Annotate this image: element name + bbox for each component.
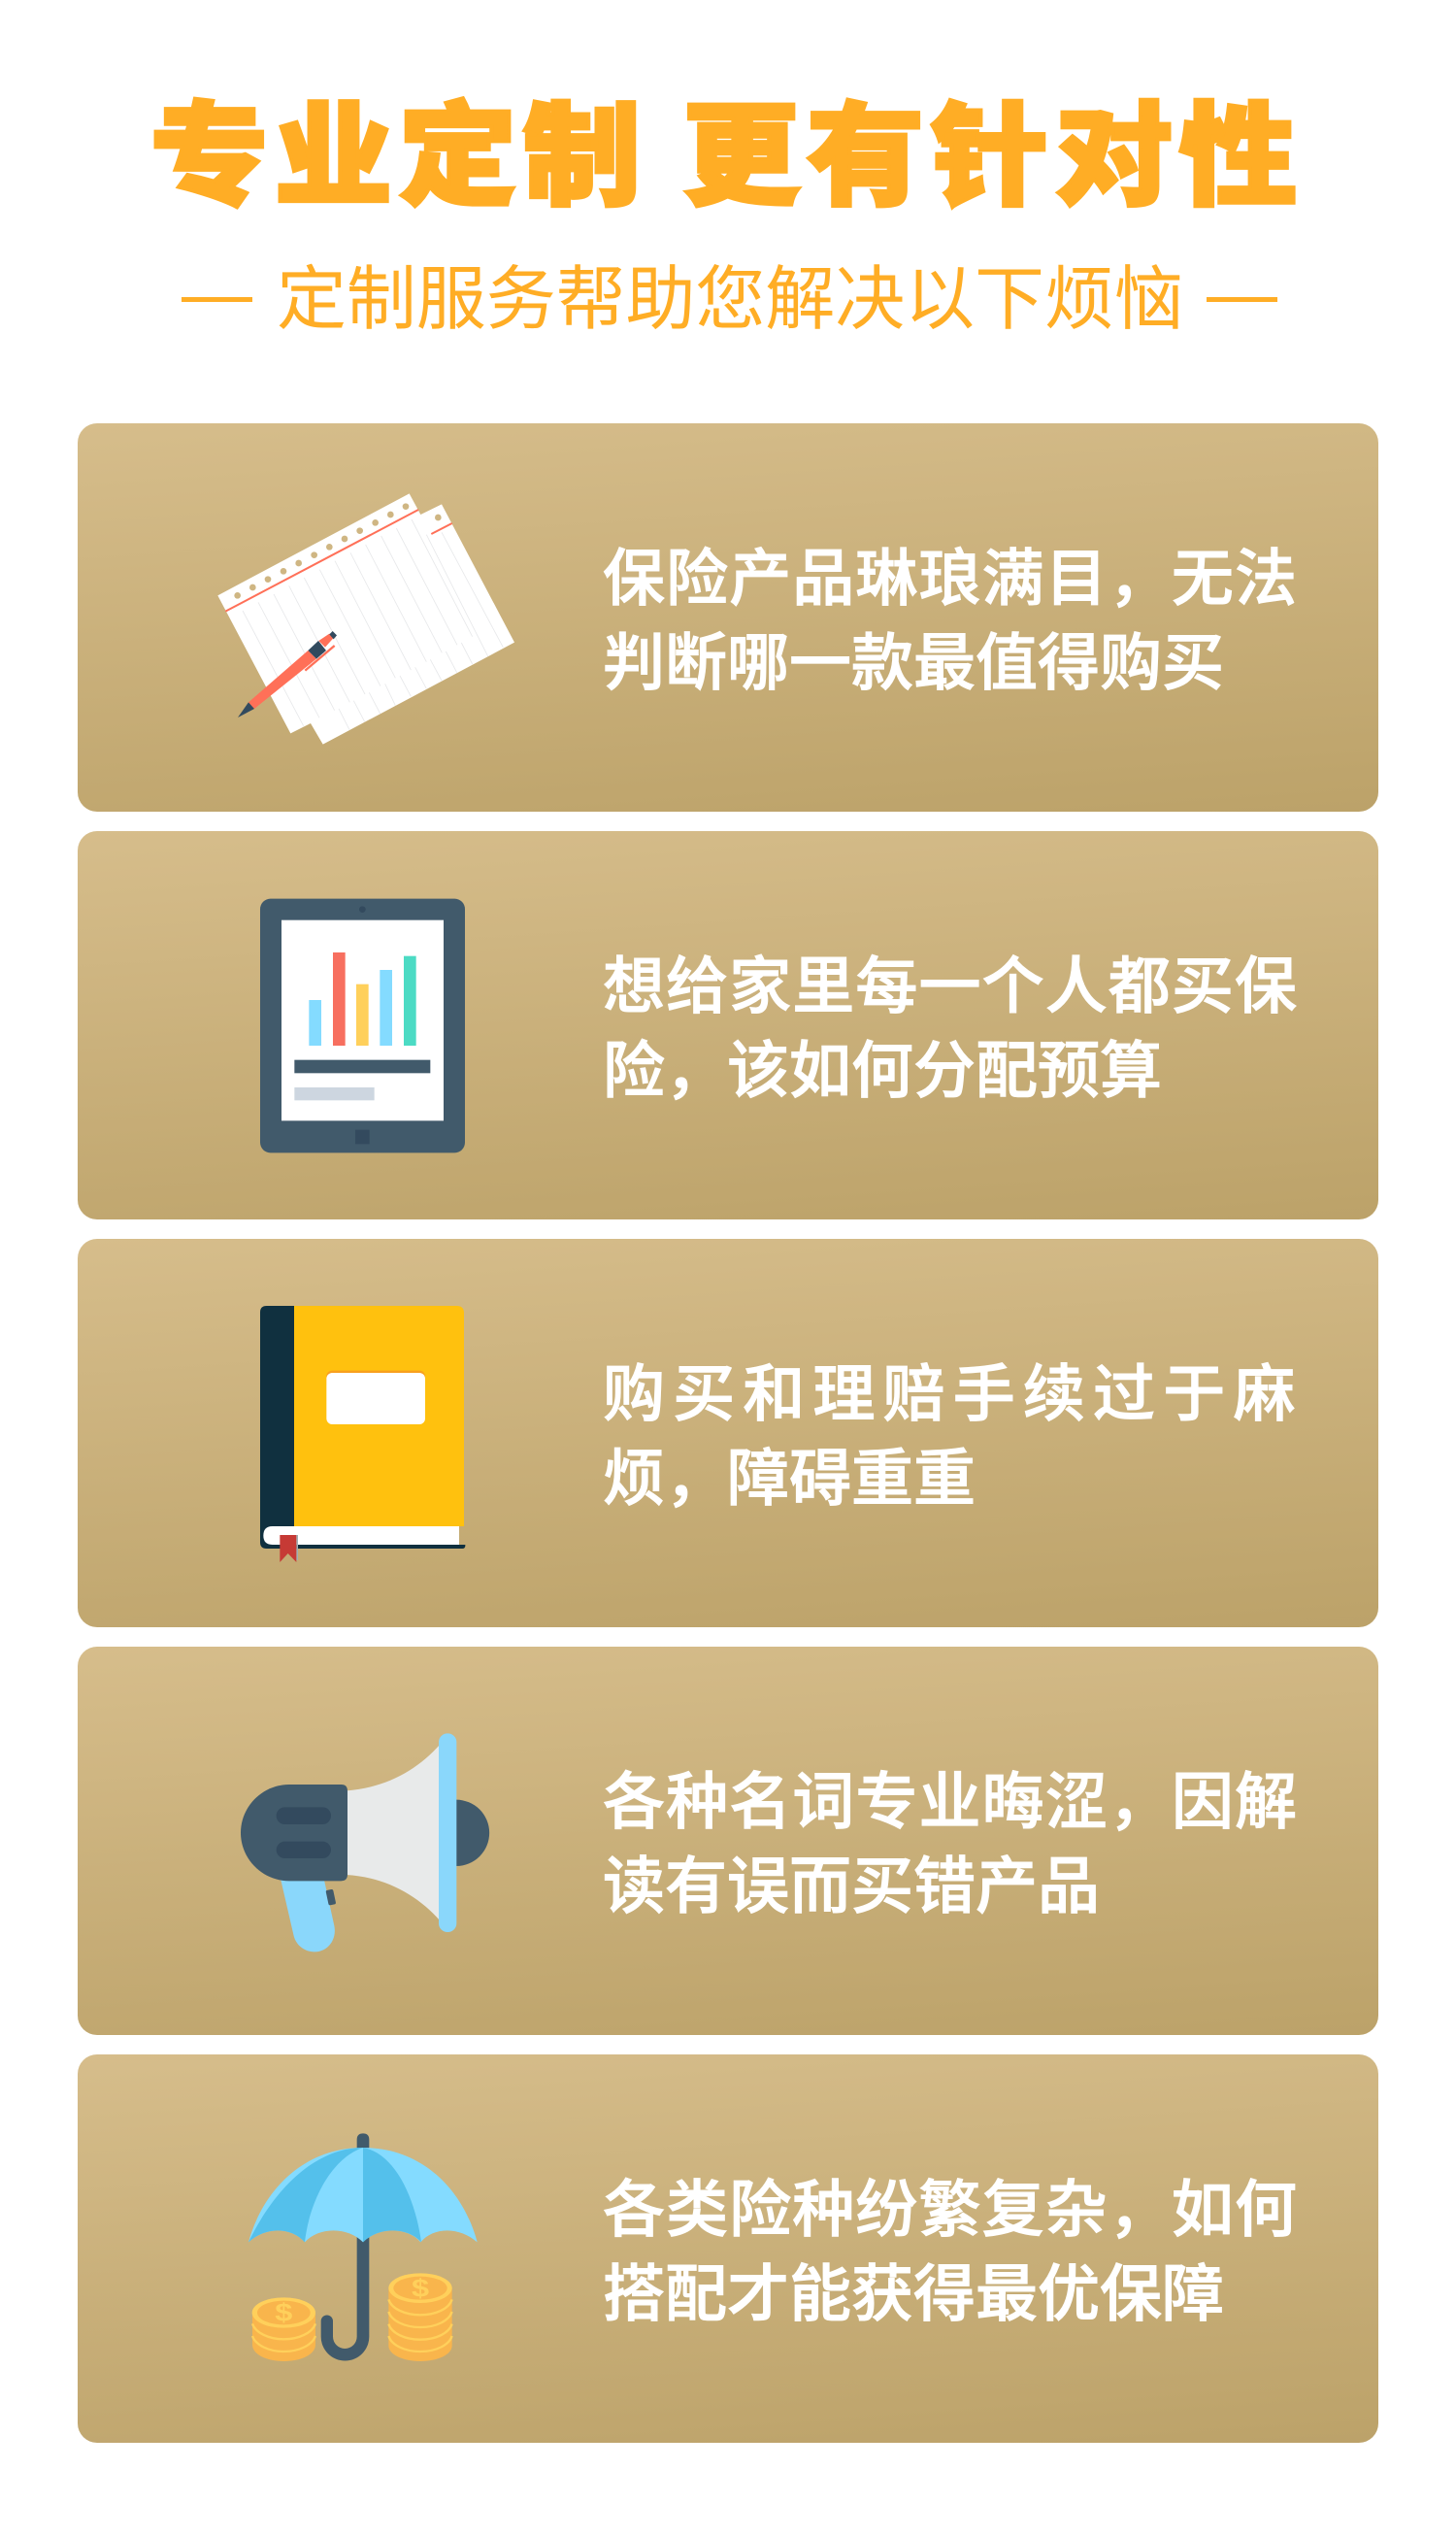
panel: product choice — [78, 423, 1378, 812]
text: coverage mix: 各类险种纷繁复杂，如何 — [603, 2175, 1298, 2245]
subtitle: 定制服务帮助您解决以下烦恼 — [277, 261, 1184, 339]
icon: megaphone — [241, 1733, 489, 1952]
text: claims process — [603, 1359, 1303, 1514]
text: jargon: 读有误而买错产品 — [603, 1852, 1100, 1921]
title: 专业定制 更有针对性 — [150, 93, 1304, 219]
icon: umbrella and coins — [248, 2133, 478, 2361]
text: product choice: 判断哪一款最值得购买 — [603, 628, 1224, 698]
text: product choice — [603, 544, 1298, 698]
text: product choice: 保险产品琳琅满目，无法 — [603, 544, 1298, 614]
text: jargon: 各种名词专业晦涩，因解 — [603, 1767, 1298, 1837]
text: claims process: 烦，障碍重重 — [603, 1444, 976, 1514]
icon: umbrella and coins: $ — [275, 2299, 292, 2327]
text: coverage mix: 搭配才能获得最优保障 — [603, 2259, 1224, 2329]
icon: book with bookmark — [260, 1306, 466, 1562]
panel: coverage mix — [78, 2054, 1378, 2443]
text: claims process: 购买和理赔手续过于麻 — [603, 1359, 1303, 1429]
text: family budget: 想给家里每一个人都买保 — [603, 951, 1298, 1021]
panel: jargon — [78, 1647, 1378, 2035]
icon: umbrella and coins: $ — [412, 2274, 429, 2303]
icon: tablet with bar chart — [260, 899, 465, 1153]
icon: notebook paper and pen — [217, 493, 514, 745]
text: family budget — [603, 951, 1298, 1106]
text: jargon — [603, 1767, 1298, 1921]
panel: family budget — [78, 831, 1378, 1219]
panel: claims process — [78, 1239, 1378, 1627]
text: coverage mix — [603, 2175, 1298, 2329]
text: family budget: 险，该如何分配预算 — [603, 1036, 1162, 1106]
